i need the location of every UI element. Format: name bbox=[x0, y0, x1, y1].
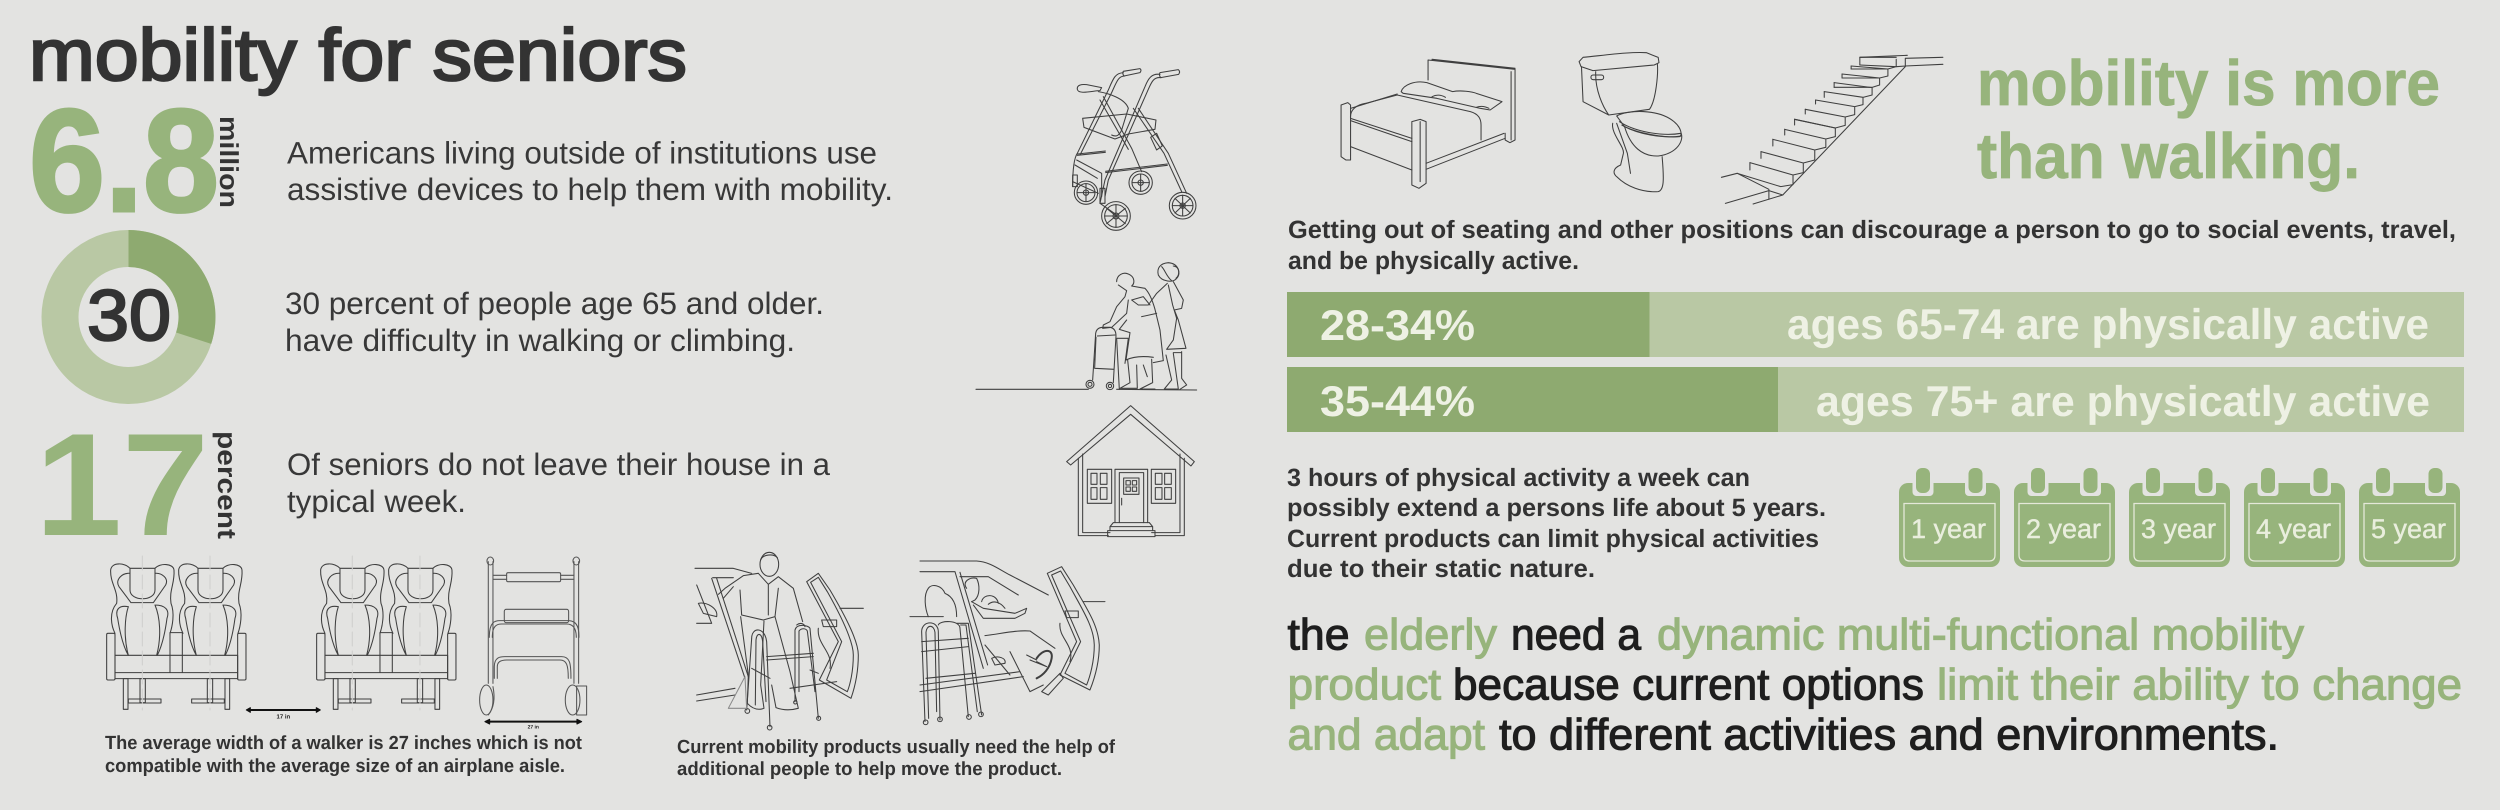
calendar: 4 year: 4 year bbox=[2256, 514, 2331, 544]
arrow: 17 in aisle bbox=[246, 708, 320, 720]
calendar: 3 year bbox=[2129, 468, 2230, 567]
arrow: 17 in aisle: 17 in bbox=[276, 713, 290, 720]
description: assistive devices to help them with mobility. bbox=[287, 172, 893, 207]
icon: bed bbox=[1341, 59, 1515, 188]
stat: 6.8 million bbox=[29, 79, 893, 242]
arrow: 27 in walker bbox=[485, 719, 582, 730]
bar value: 28-34% bbox=[1320, 302, 1475, 350]
bar: ages 75+ bbox=[1287, 367, 2464, 432]
caption: The average width of a walker is 27 inches which is not bbox=[105, 733, 583, 754]
number 6.8: 6.8 bbox=[29, 79, 219, 242]
donut chart bbox=[60, 230, 215, 386]
conclusion statement: need a bbox=[1511, 610, 1642, 660]
calendar: 2 year bbox=[2014, 468, 2115, 567]
calendar: 1 year: 1 year bbox=[1911, 514, 1986, 544]
stat: 30 percent donut bbox=[60, 230, 824, 386]
bar value: 35-44% bbox=[1320, 378, 1475, 426]
illustration: man stepping out of car bbox=[695, 552, 863, 730]
conclusion statement: to different activities and environments. bbox=[1499, 710, 2279, 760]
walker front view bbox=[480, 557, 587, 715]
physical activity text: possibly extend a persons life about 5 years. bbox=[1287, 494, 1826, 522]
conclusion statement: dynamic multi-functional mobility bbox=[1657, 610, 2304, 660]
physical activity text: 3 hours of physical activity a week can bbox=[1287, 464, 1750, 492]
number 30: 30 bbox=[87, 276, 171, 356]
unit percent: percent bbox=[212, 431, 242, 539]
calendar: 5 year bbox=[2359, 468, 2460, 567]
conclusion statement: elderly bbox=[1364, 610, 1497, 660]
panel: mobility for seniors bbox=[29, 15, 1197, 780]
icon: toilet bbox=[1579, 52, 1682, 192]
airplane seats left bbox=[107, 556, 246, 710]
heading: than walking. bbox=[1977, 120, 2360, 192]
conclusion statement: limit their ability to change bbox=[1937, 660, 2462, 710]
icon: house bbox=[1067, 406, 1194, 537]
calendar: 1 year bbox=[1899, 468, 2000, 567]
caption: additional people to help move the product. bbox=[677, 759, 1062, 780]
number 17: 17 bbox=[35, 403, 209, 566]
conclusion statement bbox=[1288, 610, 2462, 760]
airplane seats right bbox=[317, 556, 456, 710]
panel: getting into cars with a walker bbox=[677, 552, 1116, 780]
description: Of seniors do not leave their house in a bbox=[287, 447, 831, 482]
calendar: 3 year: 3 year bbox=[2141, 514, 2216, 544]
heading: mobility is more bbox=[1977, 47, 2440, 119]
conclusion statement: product bbox=[1288, 660, 1441, 710]
calendar: 5 year: 5 year bbox=[2371, 514, 2446, 544]
diagram: seats and walker bbox=[107, 556, 587, 730]
conclusion statement: because current options bbox=[1453, 660, 1924, 710]
caption: compatible with the average size of an airplane aisle. bbox=[105, 756, 565, 777]
bar label: ages 75+ are physicatly active bbox=[1816, 378, 2430, 426]
caption: Current mobility products usually need the help of bbox=[677, 737, 1116, 758]
physical activity text: due to their static nature. bbox=[1287, 555, 1595, 583]
calendar: 4 year bbox=[2244, 468, 2345, 567]
panel: airplane aisle and walker width bbox=[105, 556, 587, 777]
description: typical week. bbox=[287, 484, 466, 519]
bar: ages 65-74 bbox=[1287, 292, 2464, 357]
stat: 17 percent bbox=[35, 403, 831, 566]
illustration: woman sitting in car with walker outside bbox=[910, 561, 1105, 725]
title: mobility for seniors bbox=[29, 15, 687, 96]
unit million: million bbox=[214, 116, 244, 208]
icon: staircase bbox=[1721, 55, 1943, 204]
calendar: 2 year: 2 year bbox=[2026, 514, 2101, 544]
description: 30 percent of people age 65 and older. bbox=[285, 286, 824, 321]
conclusion statement: the bbox=[1288, 610, 1350, 660]
description: Americans living outside of institutions use bbox=[287, 136, 877, 170]
panel: mobility is more than walking bbox=[1287, 47, 2464, 760]
physical activity text: Current products can limit physical activities bbox=[1287, 525, 1819, 553]
icon: rollator walker bbox=[1073, 69, 1196, 230]
intro text: Getting out of seating and other positions can discourage a person to go to social events, travel, bbox=[1288, 216, 2456, 244]
description: have difficulty in walking or climbing. bbox=[285, 323, 795, 358]
conclusion statement: and adapt bbox=[1288, 710, 1485, 760]
bar label: ages 65-74 are physically active bbox=[1787, 301, 2429, 349]
intro text: and be physically active. bbox=[1288, 247, 1579, 275]
icon: elderly person with walker and caregiver bbox=[976, 263, 1197, 390]
arrow: 27 in walker: 27 in bbox=[528, 724, 539, 730]
calendar icons bbox=[1899, 468, 2460, 567]
